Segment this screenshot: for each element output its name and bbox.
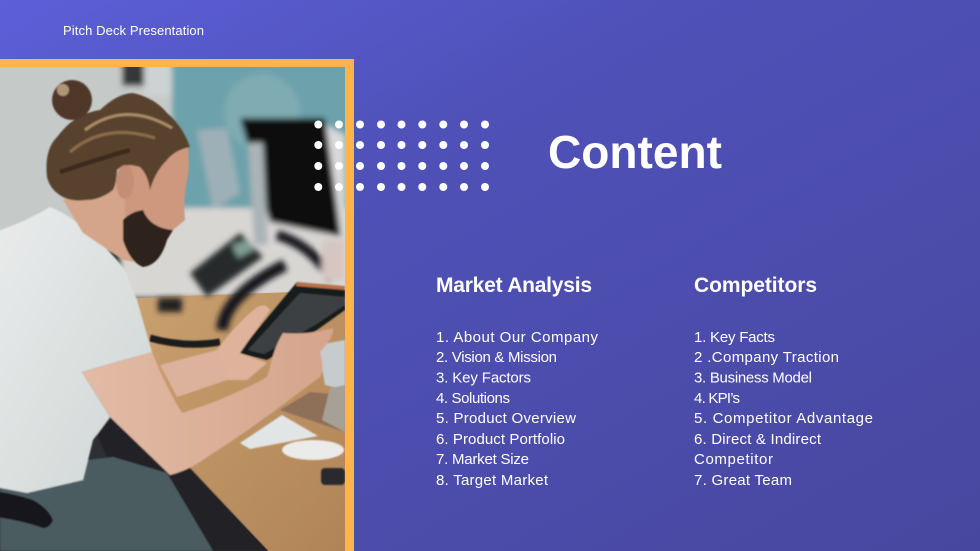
photo: man using a tablet at a desk — [0, 60, 360, 551]
hair — [46, 93, 190, 201]
list: competitors: 6. Direct & Indirect — [694, 431, 822, 448]
title: Content — [548, 126, 722, 178]
list: market analysis: 2. Vision & Mission — [436, 349, 557, 366]
person and desk objects — [0, 80, 345, 551]
shirt — [0, 207, 152, 493]
glass on desk — [322, 385, 345, 432]
under desk shadow — [90, 410, 268, 551]
wood shadow — [280, 392, 345, 432]
list: competitors: 2 .Company Traction — [694, 349, 839, 366]
hair bun — [52, 80, 92, 120]
list: market analysis: 5. Product Overview — [436, 410, 576, 427]
jeans — [0, 457, 213, 551]
list: competitors: 4. KPI’s — [694, 390, 740, 407]
list: market analysis: 8. Target Market — [436, 472, 549, 489]
smartphone on desk — [321, 468, 345, 485]
keyboard — [240, 415, 318, 449]
list: competitors — [694, 329, 873, 489]
tablet — [238, 282, 345, 360]
ear — [116, 165, 134, 199]
deck label: Pitch Deck Presentation — [63, 23, 204, 38]
list: market analysis: 1. About Our Company — [436, 329, 598, 346]
beard — [123, 210, 173, 267]
mouse — [282, 440, 344, 460]
list: competitors: 5. Competitor Advantage — [694, 410, 873, 427]
face — [125, 147, 189, 240]
dot pattern — [314, 120, 489, 191]
list: competitors: Competitor — [694, 451, 773, 468]
photo frame — [0, 59, 354, 551]
list: competitors: 7. Great Team — [694, 472, 792, 489]
desk — [135, 290, 345, 551]
list: competitors: 3. Business Model — [694, 370, 812, 386]
column: market analysis — [436, 274, 598, 489]
office background — [0, 60, 360, 298]
list: market analysis: 6. Product Portfolio — [436, 431, 565, 448]
papers on desk — [318, 340, 345, 390]
heading: market analysis: Market Analysis — [436, 274, 592, 297]
neck — [63, 175, 135, 262]
list: market analysis: 7. Market Size — [436, 451, 529, 468]
desk phones and cables — [158, 233, 345, 330]
far arm — [160, 350, 227, 397]
list: market analysis — [436, 329, 598, 489]
list: competitors: 1. Key Facts — [694, 329, 775, 346]
chair arm — [0, 491, 53, 528]
cable on desk — [150, 338, 220, 344]
holding hand — [217, 306, 270, 380]
near arm and hand — [82, 328, 333, 475]
list: market analysis: 3. Key Factors — [436, 370, 531, 386]
heading: competitors: Competitors — [694, 274, 817, 297]
list: market analysis: 4. Solutions — [436, 390, 510, 407]
column: competitors — [694, 274, 873, 489]
